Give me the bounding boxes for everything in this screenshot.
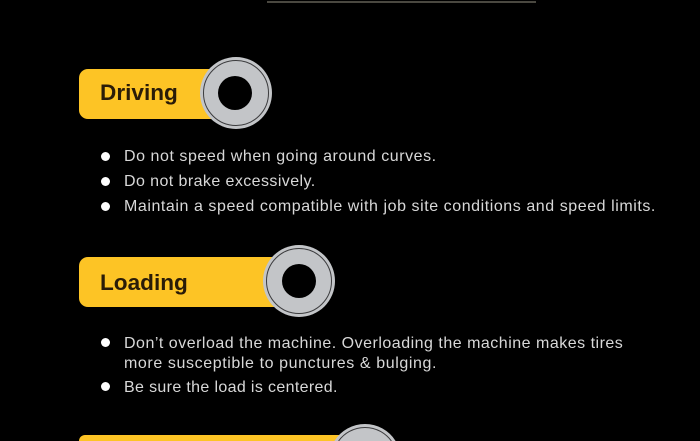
icon: wheel <box>263 245 335 317</box>
heading bar: loading <box>79 257 294 307</box>
panel: driving <box>79 57 272 129</box>
bullet 1 <box>101 152 110 161</box>
bullet 2 <box>101 382 110 391</box>
heading bar: driving <box>79 69 229 119</box>
icon: wheel <box>334 424 396 441</box>
text: overload: more susceptible to punctures & bulging. <box>124 355 437 372</box>
text: overload <box>124 335 623 372</box>
text: centered: Be sure the load is centered. <box>124 379 338 396</box>
panel: next section <box>79 424 396 441</box>
heading: loading: Loading <box>100 270 188 295</box>
heading bar: next section <box>79 435 359 441</box>
bullet 2 <box>101 177 110 186</box>
text: overload: Don’t overload the machine. Overloading the machine makes tires <box>124 335 623 352</box>
text: speed: Maintain a speed compatible with job site conditions and speed limits. <box>124 198 656 215</box>
bullet 1 <box>101 338 110 347</box>
panel: loading <box>79 245 335 317</box>
bullet 3 <box>101 202 110 211</box>
bullet list: loading <box>101 335 623 396</box>
top rule <box>267 1 536 3</box>
bullet list: driving <box>101 148 656 215</box>
text: curves: Do not speed when going around curves. <box>124 148 437 165</box>
icon: wheel <box>200 57 272 129</box>
heading: driving: Driving <box>100 80 178 105</box>
text: brake: Do not brake excessively. <box>124 173 316 190</box>
